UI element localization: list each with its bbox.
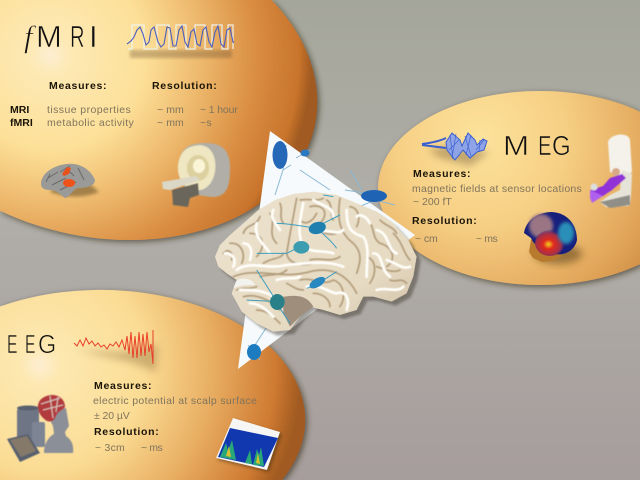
text: fMRI row: fMRI [10, 117, 33, 129]
heading: EEG: E [25, 331, 36, 359]
text: EEG resolution [94, 426, 163, 454]
text: fMRI row [10, 117, 212, 129]
text: MEG measures: magnetic fields at sensor locations [412, 183, 582, 195]
text: MEG measures: Measures: [413, 168, 471, 180]
icon: EEG cap and amplifier [7, 395, 73, 462]
heading: EEG: G [38, 331, 56, 359]
icon: MRI scanner [162, 143, 230, 207]
text: fMRI row: ~ s [200, 117, 212, 129]
panel: EEG [0, 290, 305, 480]
heading: fMRI [24, 19, 98, 54]
text: fMRI row: metabolic activity [47, 117, 135, 129]
text: EEG resolution: Resolution: [94, 426, 159, 438]
chart: MEG waveform [422, 133, 490, 166]
text: MEG measures: ~ 200 fT [413, 196, 452, 208]
heading: fMRI: f [24, 19, 37, 54]
text: MEG resolution: ~ ms [476, 233, 498, 245]
text: MEG resolution: Resolution: [412, 215, 477, 227]
brain [215, 192, 421, 336]
text: EEG measures: Measures: [94, 380, 152, 392]
heading: EEG: E [7, 331, 18, 359]
text: EEG resolution: ~ 3cm [95, 442, 125, 454]
heading: MEG [503, 129, 571, 162]
text: fMRI row: ~ mm [157, 117, 184, 129]
icon: MEG scanner [590, 134, 632, 208]
text: EEG measures: electric potential at scalp surface [93, 395, 257, 407]
heading: EEG [7, 331, 56, 359]
text: MRI row: MRI [10, 104, 29, 116]
text: MRI row: tissue properties [47, 104, 131, 116]
icon: spectrogram [216, 418, 282, 472]
heading: MEG: G [552, 129, 571, 161]
heading: MEG: M [503, 131, 529, 162]
text: EEG resolution: ~ ms [141, 442, 163, 454]
neuron triangle [238, 131, 415, 369]
chart: fMRI signal [127, 25, 234, 58]
panel: MEG [378, 91, 640, 285]
text: MRI row: ~ mm [157, 104, 184, 116]
text: column headings: Measures: [49, 80, 107, 92]
text: EEG measures: ± 20 µV [94, 410, 130, 422]
text: column headings [49, 80, 217, 92]
text: EEG measures [93, 380, 257, 422]
icon: activated brain [41, 164, 99, 198]
panel: fMRI [0, 0, 317, 240]
text: MEG resolution [412, 215, 498, 245]
heading: fMRI: I [89, 19, 98, 54]
heading: MEG: E [538, 131, 551, 162]
chart: EEG waveform [74, 330, 158, 372]
text: column headings: Resolution: [152, 80, 217, 92]
heading: fMRI: M [36, 19, 62, 54]
text: MEG measures [412, 168, 582, 208]
text: MRI row: ~ 1 hour [200, 104, 238, 116]
text: MEG resolution: ~ cm [415, 233, 438, 245]
brain folds [223, 198, 410, 323]
icon: MEG field map head [524, 212, 582, 264]
neurons over brain [247, 195, 340, 323]
heading: fMRI: R [70, 19, 85, 54]
text: MRI row [10, 104, 238, 116]
